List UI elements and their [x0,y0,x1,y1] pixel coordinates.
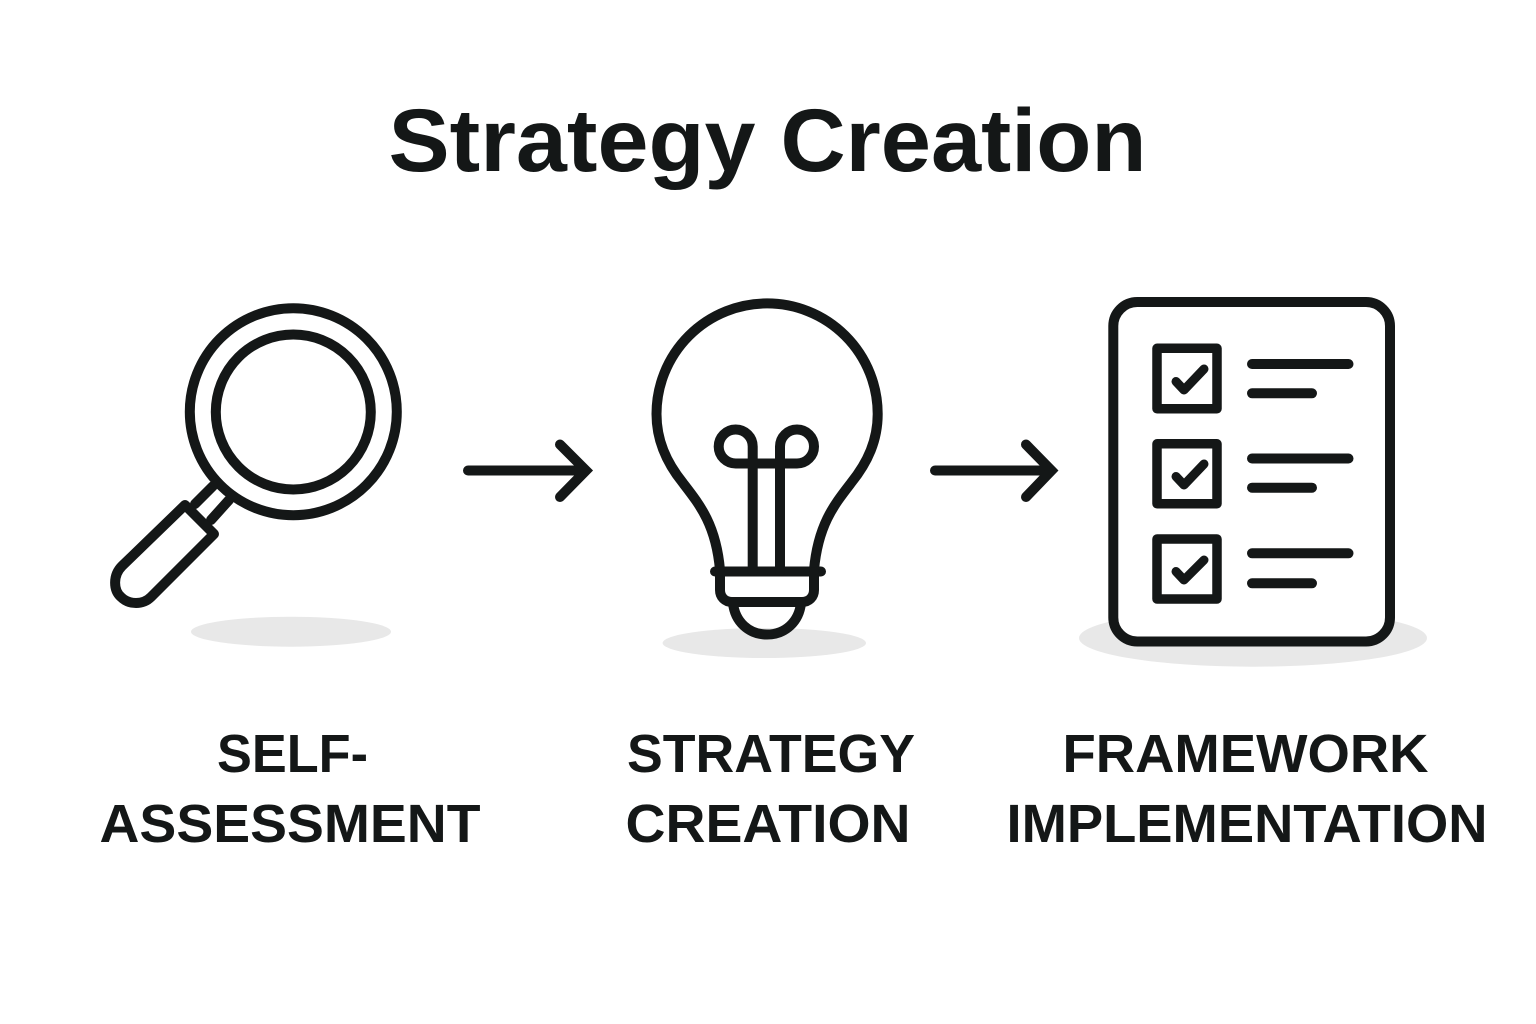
shadow: checklist [1079,609,1427,667]
label: self-assessment: ASSESSMENT [100,794,481,854]
label: strategy creation [626,724,915,854]
label: strategy creation: CREATION [626,794,910,854]
label: self-assessment: SELF- [217,724,368,784]
title [388,90,1146,190]
icon: magnifying glass [115,308,397,647]
shadow: magnifying glass [191,617,391,647]
label: self-assessment [100,724,481,854]
label: strategy creation: STRATEGY [627,724,915,784]
title: Strategy [388,90,756,190]
label: framework implementation: FRAMEWORK [1062,724,1428,784]
icon: light bulb [656,303,878,658]
arrow 2 [935,444,1052,497]
icon: checklist [1079,302,1427,667]
label: framework implementation [1006,724,1488,854]
title: Creation [780,90,1146,190]
arrow 1 [468,444,586,497]
shadow: light bulb [663,628,866,658]
label: framework implementation: IMPLEMENTATION [1006,794,1488,854]
